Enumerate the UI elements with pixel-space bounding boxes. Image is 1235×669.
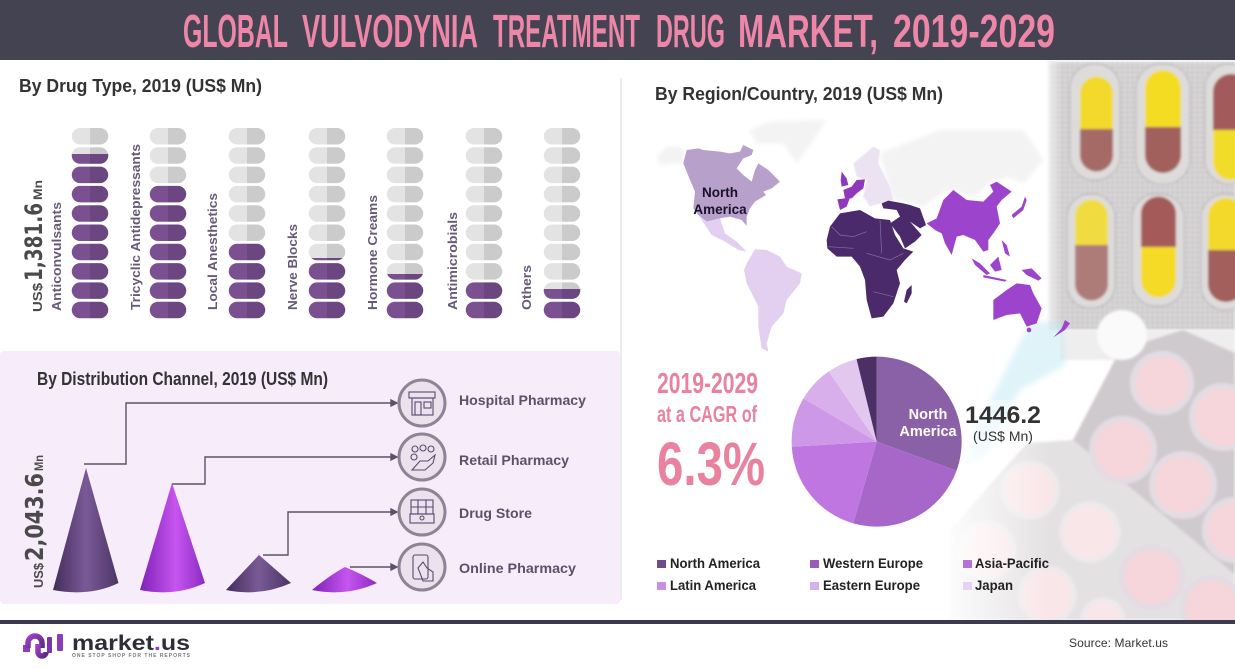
- category label: local anesthetics: Local Anesthetics: [205, 193, 220, 310]
- cone: drug store: [226, 555, 291, 592]
- map: eastern europe: [853, 147, 893, 207]
- slice: western europe: [853, 442, 957, 527]
- capsule column: antimicrobials: [466, 128, 502, 318]
- map: north america: [683, 145, 780, 226]
- logo: market.us: [23, 632, 191, 659]
- pie value: 1446.2: [965, 402, 1041, 429]
- legend swatch: asia-pacific: [963, 560, 972, 568]
- capsule column: tricyclic antidepressants: [150, 128, 186, 318]
- slice: japan: [829, 359, 877, 442]
- capsule column: hormone creams: [387, 128, 423, 318]
- value label: hospital pharmacy: US$: [31, 562, 46, 588]
- pie label: north america: America: [899, 424, 958, 440]
- label: hospital pharmacy: Hospital Pharmacy: [459, 392, 586, 408]
- capsule column: anticonvulsants: [72, 128, 108, 318]
- header bar: [0, 0, 1235, 60]
- map: western europe: [837, 172, 865, 210]
- capsule column: others: [544, 128, 580, 318]
- photo: capsule blister pack: [1048, 62, 1235, 330]
- legend swatch: eastern europe: [810, 582, 819, 590]
- title: GLOBAL: [183, 5, 288, 57]
- map label: north america: America: [693, 202, 747, 217]
- capsule column: nerve blocks: [309, 128, 345, 318]
- value label: hospital pharmacy: Mn: [32, 455, 46, 471]
- logo wordmark: market .us: [72, 632, 190, 655]
- slice: north america: [877, 357, 962, 471]
- legend text: asia-pacific: Asia-Pacific: [975, 555, 1049, 571]
- legend text: japan: Japan: [975, 577, 1013, 593]
- map: asia-pacific: [927, 182, 1070, 337]
- category label: tricyclic antidepressants: Tricyclic Antidepressants: [128, 144, 143, 310]
- pie label: north america: North: [909, 407, 947, 423]
- map: latin america: [698, 215, 802, 352]
- legend text: north america: North America: [670, 555, 760, 571]
- value label: anticonvulsants: Mn: [31, 180, 45, 200]
- icon: hospital pharmacy: [399, 380, 445, 426]
- photo: pink tablet blisters: [950, 330, 1235, 640]
- title: DRUG: [656, 5, 725, 57]
- label: retail pharmacy: Retail Pharmacy: [459, 452, 569, 468]
- world map: [657, 120, 1070, 352]
- category label: nerve blocks: Nerve Blocks: [285, 224, 300, 310]
- logo mark: [23, 634, 63, 656]
- map: other regions: [657, 120, 1043, 207]
- cone: retail pharmacy: [140, 483, 205, 592]
- title: MARKET,: [738, 5, 878, 57]
- icon: retail pharmacy: [399, 434, 445, 480]
- legend text: eastern europe: Eastern Europe: [823, 577, 920, 593]
- cone: online pharmacy: [312, 567, 377, 592]
- cagr period: 2019-2029: [657, 368, 758, 400]
- source note: Source: Market.us: [1069, 636, 1168, 650]
- heading: by drug type: By Drug Type, 2019 (US$ Mn): [19, 76, 262, 96]
- callout: cagr: [657, 368, 765, 498]
- title: 2019-2029: [893, 5, 1055, 57]
- value label: hospital pharmacy: 2,043.6: [20, 473, 49, 561]
- arrow: drug store: [263, 509, 397, 555]
- heading: by distribution channel: By Distribution Channel, 2019 (US$ Mn): [37, 369, 328, 389]
- slice: asia-pacific: [792, 442, 877, 523]
- cone: hospital pharmacy: [53, 468, 118, 592]
- logo tagline: ONE STOP SHOP FOR THE REPORTS: [72, 653, 191, 659]
- legend text: latin america: Latin America: [670, 577, 756, 593]
- legend swatch: latin america: [657, 582, 666, 590]
- category label: hormone creams: Hormone Creams: [365, 195, 380, 310]
- pie chart: [792, 357, 962, 527]
- category label: anticonvulsants: Anticonvulsants: [49, 202, 64, 311]
- slice: others: [857, 357, 877, 442]
- arrow: retail pharmacy: [172, 454, 397, 484]
- footer rule: [0, 620, 1235, 624]
- title: VULVODYNIA: [302, 5, 478, 57]
- value label: anticonvulsants: 1,381.6: [20, 203, 48, 281]
- footer background: [0, 624, 1235, 669]
- legend: [657, 555, 1049, 593]
- capsule column: local anesthetics: [229, 128, 265, 318]
- legend swatch: north america: [657, 560, 666, 568]
- panel divider: [620, 78, 622, 600]
- cagr caption: at a CAGR of: [657, 401, 757, 427]
- legend text: western europe: Western Europe: [823, 555, 923, 571]
- pie value unit: (US$ Mn): [973, 428, 1033, 444]
- photo: white fade over tablets: [940, 400, 1050, 620]
- slice: latin america: [792, 398, 877, 447]
- title: TREATMENT: [493, 5, 640, 57]
- photo: table surface: [1060, 330, 1235, 360]
- title: [183, 5, 1055, 57]
- label: online pharmacy: Online Pharmacy: [459, 560, 576, 576]
- arrow: online pharmacy: [350, 564, 397, 570]
- legend swatch: japan: [963, 582, 972, 590]
- label: drug store: Drug Store: [459, 505, 532, 521]
- arrow: hospital pharmacy: [84, 400, 397, 464]
- icon: online pharmacy: [399, 544, 445, 590]
- category label: antimicrobials: Antimicrobials: [445, 212, 460, 310]
- photo: fade on blister pack edge: [1040, 62, 1062, 332]
- panel: by drug type: [19, 76, 580, 318]
- map label: north america: North: [702, 185, 738, 200]
- cagr value: 6.3%: [657, 430, 765, 498]
- value label: anticonvulsants: US$: [30, 282, 45, 312]
- panel background: [0, 351, 620, 604]
- icon: drug store: [399, 489, 445, 535]
- map: africa and middle east: [827, 201, 926, 318]
- panel: by distribution channel: [0, 351, 620, 604]
- category label: others: Others: [519, 265, 534, 310]
- slice: eastern europe: [803, 371, 877, 442]
- photo: white tablet: [1097, 310, 1147, 360]
- legend swatch: western europe: [810, 560, 819, 568]
- photo: light blue packet: [965, 322, 1066, 465]
- heading: by region: By Region/Country, 2019 (US$ Mn): [655, 84, 943, 104]
